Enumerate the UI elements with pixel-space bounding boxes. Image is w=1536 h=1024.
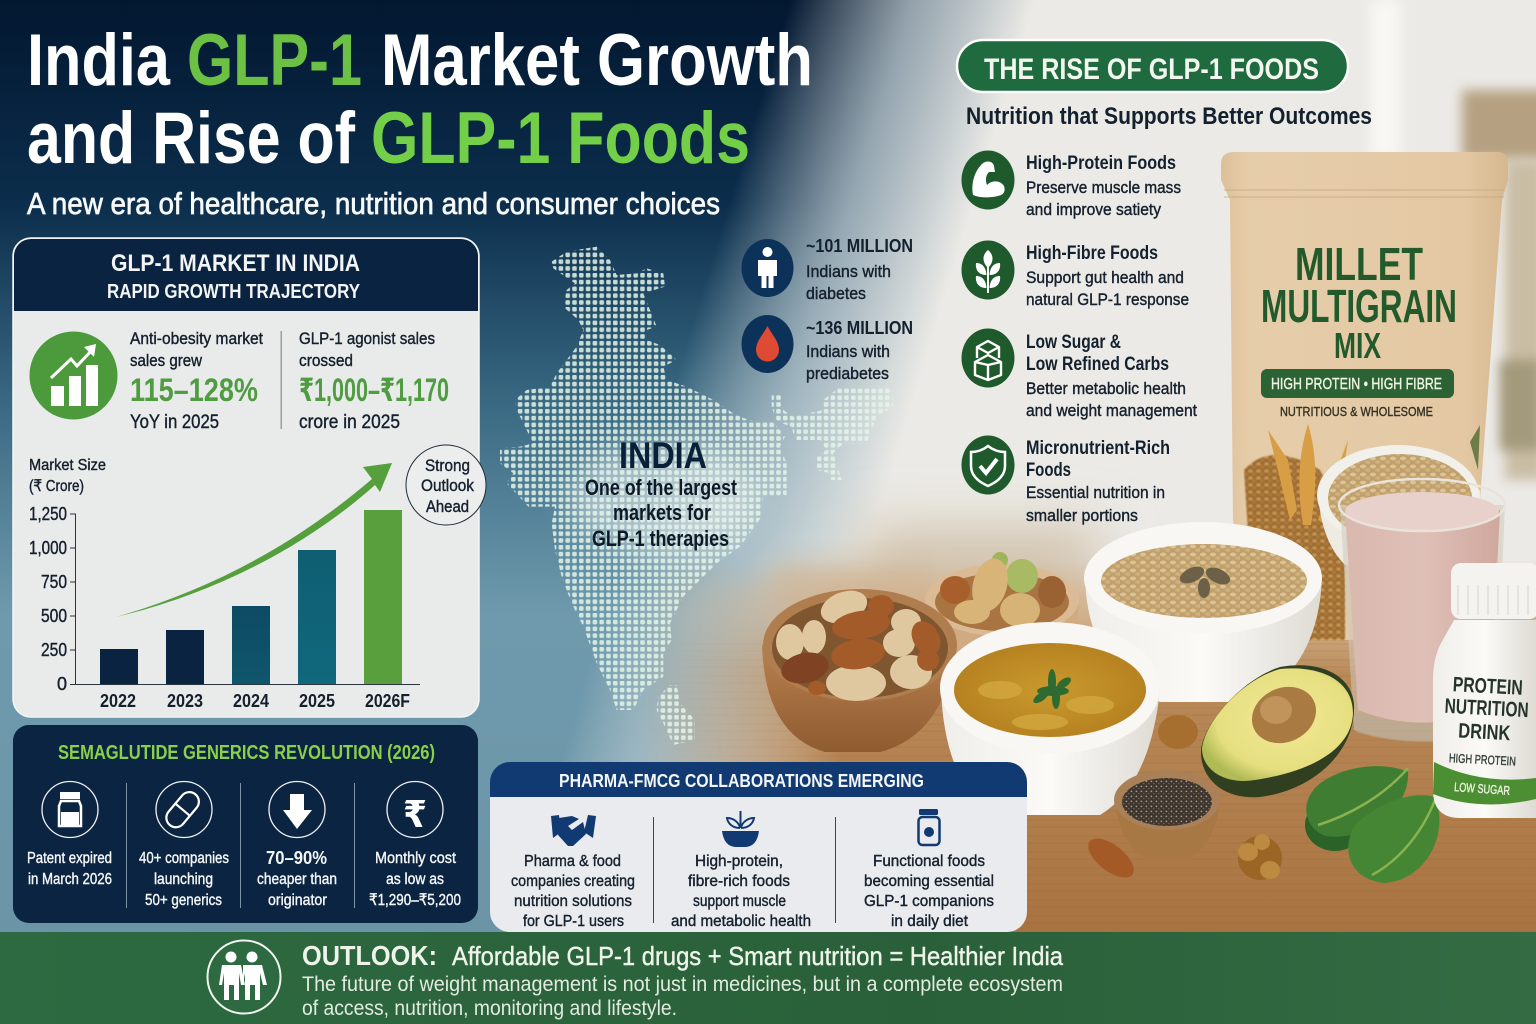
outlook text: [302, 973, 1063, 1020]
icon: supplement jar: [918, 809, 940, 845]
stat: GLP-1 agonist sales: GLP-1 agonist sales: [299, 329, 435, 348]
item: companies launching: launching: [154, 871, 213, 888]
heading pill: the rise of GLP-1 foods: THE RISE OF GLP-1 FOODS: [984, 53, 1319, 86]
bar chart: market size: 0: [57, 674, 67, 694]
stat: diabetes: [742, 236, 913, 303]
outlook text: of access, nutrition, monitoring and lifestyle.: [302, 997, 677, 1020]
map caption: markets for: [613, 500, 711, 525]
item: micronutrient-rich foods: Foods: [1026, 460, 1071, 481]
stat: prediabetes: [742, 315, 913, 383]
title: and Rise of: [27, 98, 356, 179]
bowl: small nuts: [925, 552, 1079, 680]
item: patent expired: [27, 850, 112, 888]
icon: down arrow: [269, 782, 325, 838]
panel heading: PHARMA-FMCG COLLABORATIONS EMERGING: [559, 771, 924, 791]
outlook headline: Affordable GLP-1 drugs + Smart nutrition = Healthier India: [452, 941, 1063, 971]
item: low sugar and refined carbs: and weight management: [1026, 401, 1197, 420]
stat: GLP-1 agonist sales: crore in 2025: [299, 412, 400, 433]
bottle: protein nutrition drink: [1433, 563, 1536, 818]
bar chart: market size: 2022: [100, 691, 136, 711]
icon: capsule: [156, 782, 212, 838]
panel: GLP-1 market in India: [13, 238, 486, 717]
item: high-protein foods: and improve satiety: [1026, 200, 1161, 219]
icon: growth chart: [30, 332, 118, 420]
item: companies launching: [139, 850, 229, 909]
bottle: protein nutrition drink: LOW SUGAR: [1454, 780, 1510, 798]
item: high-protein foods: [962, 150, 1181, 219]
pouch: millet multigrain mix: [1221, 152, 1508, 640]
stat: GLP-1 agonist sales: [299, 329, 449, 433]
item: high-protein foods: Preserve muscle mass: [1026, 178, 1181, 197]
callout: strong outlook ahead: Ahead: [426, 497, 469, 516]
bowl: mixed nuts: [762, 585, 957, 752]
stat: anti-obesity market sales: [130, 329, 263, 433]
icon: rupee: ₹: [403, 794, 427, 835]
item: pharma and food: companies creating: [511, 873, 635, 890]
title: Market Growth: [381, 20, 813, 101]
stat: GLP-1 agonist sales: ₹1,000–₹1,170: [299, 372, 449, 408]
item: low sugar and refined carbs: Better metabolic health: [1026, 379, 1186, 398]
item: cheaper than originator: 70–90%: [266, 848, 327, 868]
item: high-protein fibre-rich: High-protein,: [695, 853, 783, 870]
bar chart: market size: 1,000: [29, 538, 67, 558]
stat: anti-obesity market sales: YoY in 2025: [130, 412, 219, 433]
item: low sugar and refined carbs: [962, 328, 1197, 420]
icon: handshake: [551, 815, 596, 846]
stat: GLP-1 agonist sales: crossed: [299, 351, 353, 370]
map caption: [585, 475, 738, 551]
panel: pharma-FMCG collaborations: [490, 762, 1027, 932]
stat: prediabetes: prediabetes: [806, 364, 889, 383]
item: cheaper than originator: [257, 848, 337, 909]
bowl: grains behind glass: [1317, 445, 1480, 565]
item: functional foods: [864, 853, 994, 930]
outlook headline: OUTLOOK:: [302, 940, 437, 971]
item: patent expired: in March 2026: [28, 871, 112, 888]
map caption: One of the largest: [585, 475, 738, 500]
wooden table: [600, 560, 1536, 940]
bar chart: market size: 2025: [299, 691, 335, 711]
stat: anti-obesity market sales: 115–128%: [130, 372, 258, 408]
outlook band: [0, 932, 1536, 1024]
bar chart: market size: 2026F: [365, 691, 410, 711]
arrow: growth trend: [116, 463, 392, 617]
avocado half: [1201, 665, 1354, 797]
item: micronutrient-rich foods: Essential nutrition in: [1026, 483, 1165, 502]
dotted India map: [495, 235, 905, 745]
item: high-protein fibre-rich: fibre-rich foods: [688, 873, 790, 890]
callout: strong outlook ahead: Outlook: [421, 476, 474, 495]
item: functional foods: GLP-1 companions: [864, 893, 994, 910]
item: functional foods: in daily diet: [891, 913, 969, 930]
spinach leaves: [1305, 766, 1439, 883]
item: high-fibre foods: [962, 240, 1189, 309]
item: low sugar and refined carbs: Low Sugar &: [1026, 332, 1121, 353]
bowl: lentil soup: [940, 622, 1160, 815]
item: high-protein fibre-rich: [671, 853, 811, 930]
item: micronutrient-rich foods: [962, 436, 1170, 525]
bar chart: market size: 750: [41, 572, 67, 592]
stat: diabetes: ~101 MILLION: [806, 236, 913, 256]
bar chart: market size: 2024: [233, 691, 269, 711]
stat: diabetes: Indians with: [806, 262, 891, 281]
item: micronutrient-rich foods: smaller portions: [1026, 506, 1138, 525]
panel: semaglutide generics revolution: [13, 725, 478, 923]
pouch: millet multigrain mix: MILLET: [1295, 238, 1423, 290]
pouch: millet multigrain mix: HIGH PROTEIN • HIGH FIBRE: [1271, 376, 1442, 393]
pouch: millet multigrain mix: NUTRITIOUS & WHOLESOME: [1280, 404, 1433, 419]
panel heading: RAPID GROWTH TRAJECTORY: [107, 281, 361, 303]
chia seed bowl: [1114, 770, 1220, 860]
item: high-fibre foods: natural GLP-1 response: [1026, 290, 1189, 309]
sub-heading: Nutrition that Supports Better Outcomes: [966, 103, 1372, 130]
bar chart: market size: 250: [41, 640, 67, 660]
item: patent expired: Patent expired: [27, 850, 112, 867]
item: companies launching: 40+ companies: [139, 850, 229, 867]
bar chart: market size: (₹ Crore): [29, 478, 84, 495]
callout: strong outlook ahead: [406, 445, 486, 525]
item: low sugar and refined carbs: Low Refined Carbs: [1026, 354, 1169, 375]
item: functional foods: becoming essential: [864, 873, 994, 890]
item: micronutrient-rich foods: Micronutrient-Rich: [1026, 438, 1170, 459]
map label: India: INDIA: [619, 435, 707, 476]
icon: two people: [208, 940, 280, 1014]
item: cheaper than originator: originator: [268, 892, 328, 909]
panel heading: GLP-1 MARKET IN INDIA: [111, 250, 360, 277]
item: cheaper than originator: cheaper than: [257, 871, 337, 888]
item: high-protein fibre-rich: support muscle: [693, 893, 786, 910]
bar chart: market size: 1,250: [29, 504, 67, 524]
item: high-protein foods: High-Protein Foods: [1026, 153, 1176, 174]
item: monthly cost: Monthly cost: [375, 850, 457, 867]
panel heading: [107, 250, 361, 303]
stat: prediabetes: Indians with: [806, 342, 890, 361]
callout: strong outlook ahead: Strong: [425, 456, 470, 475]
item: functional foods: Functional foods: [873, 853, 985, 870]
item: high-fibre foods: High-Fibre Foods: [1026, 243, 1158, 264]
outlook text: The future of weight management is not just in medicines, but in a complete ecosystem: [302, 973, 1063, 996]
bar chart: market size: 500: [41, 606, 67, 626]
item: pharma and food: nutrition solutions: [514, 893, 632, 910]
item: high-protein fibre-rich: and metabolic health: [671, 913, 811, 930]
bar chart: market size: [29, 457, 420, 711]
nuts on table: [1082, 715, 1282, 885]
item: monthly cost: as low as: [386, 871, 444, 888]
glass: pink smoothie: [1339, 479, 1505, 742]
heading pill: the rise of GLP-1 foods: [957, 40, 1348, 92]
item: monthly cost: ₹1,290–₹5,200: [369, 892, 461, 909]
icon: medicine bottle: [42, 782, 98, 838]
title: GLP-1 Foods: [371, 98, 750, 179]
item: high-fibre foods: Support gut health and: [1026, 268, 1184, 287]
stat: anti-obesity market sales: sales grew: [130, 351, 203, 370]
subtitle: A new era of healthcare, nutrition and consumer choices: [27, 186, 720, 221]
bar chart: market size: 2023: [167, 691, 203, 711]
stat: prediabetes: ~136 MILLION: [806, 318, 913, 338]
stat: diabetes: diabetes: [806, 284, 866, 303]
bottle: protein nutrition drink: DRINK: [1458, 720, 1511, 745]
item: pharma and food: for GLP-1 users: [523, 913, 624, 930]
pouch: millet multigrain mix: MIX: [1334, 325, 1381, 366]
panel heading: SEMAGLUTIDE GENERICS REVOLUTION (2026): [58, 742, 435, 764]
item: companies launching: 50+ generics: [145, 892, 222, 909]
title: [27, 20, 813, 179]
stat: anti-obesity market sales: Anti-obesity market: [130, 329, 263, 348]
item: pharma and food: [511, 853, 635, 930]
icon: rupee: [387, 782, 443, 838]
map caption: GLP-1 therapies: [592, 526, 729, 551]
title: GLP-1: [187, 20, 362, 101]
item: pharma and food: Pharma & food: [524, 853, 621, 870]
bowl: oats with seeds: [1084, 522, 1322, 702]
bar chart: market size: Market Size: [29, 457, 106, 474]
title: India: [27, 20, 171, 101]
icon: bowl with sprout: [722, 811, 759, 847]
item: monthly cost: [369, 850, 461, 909]
